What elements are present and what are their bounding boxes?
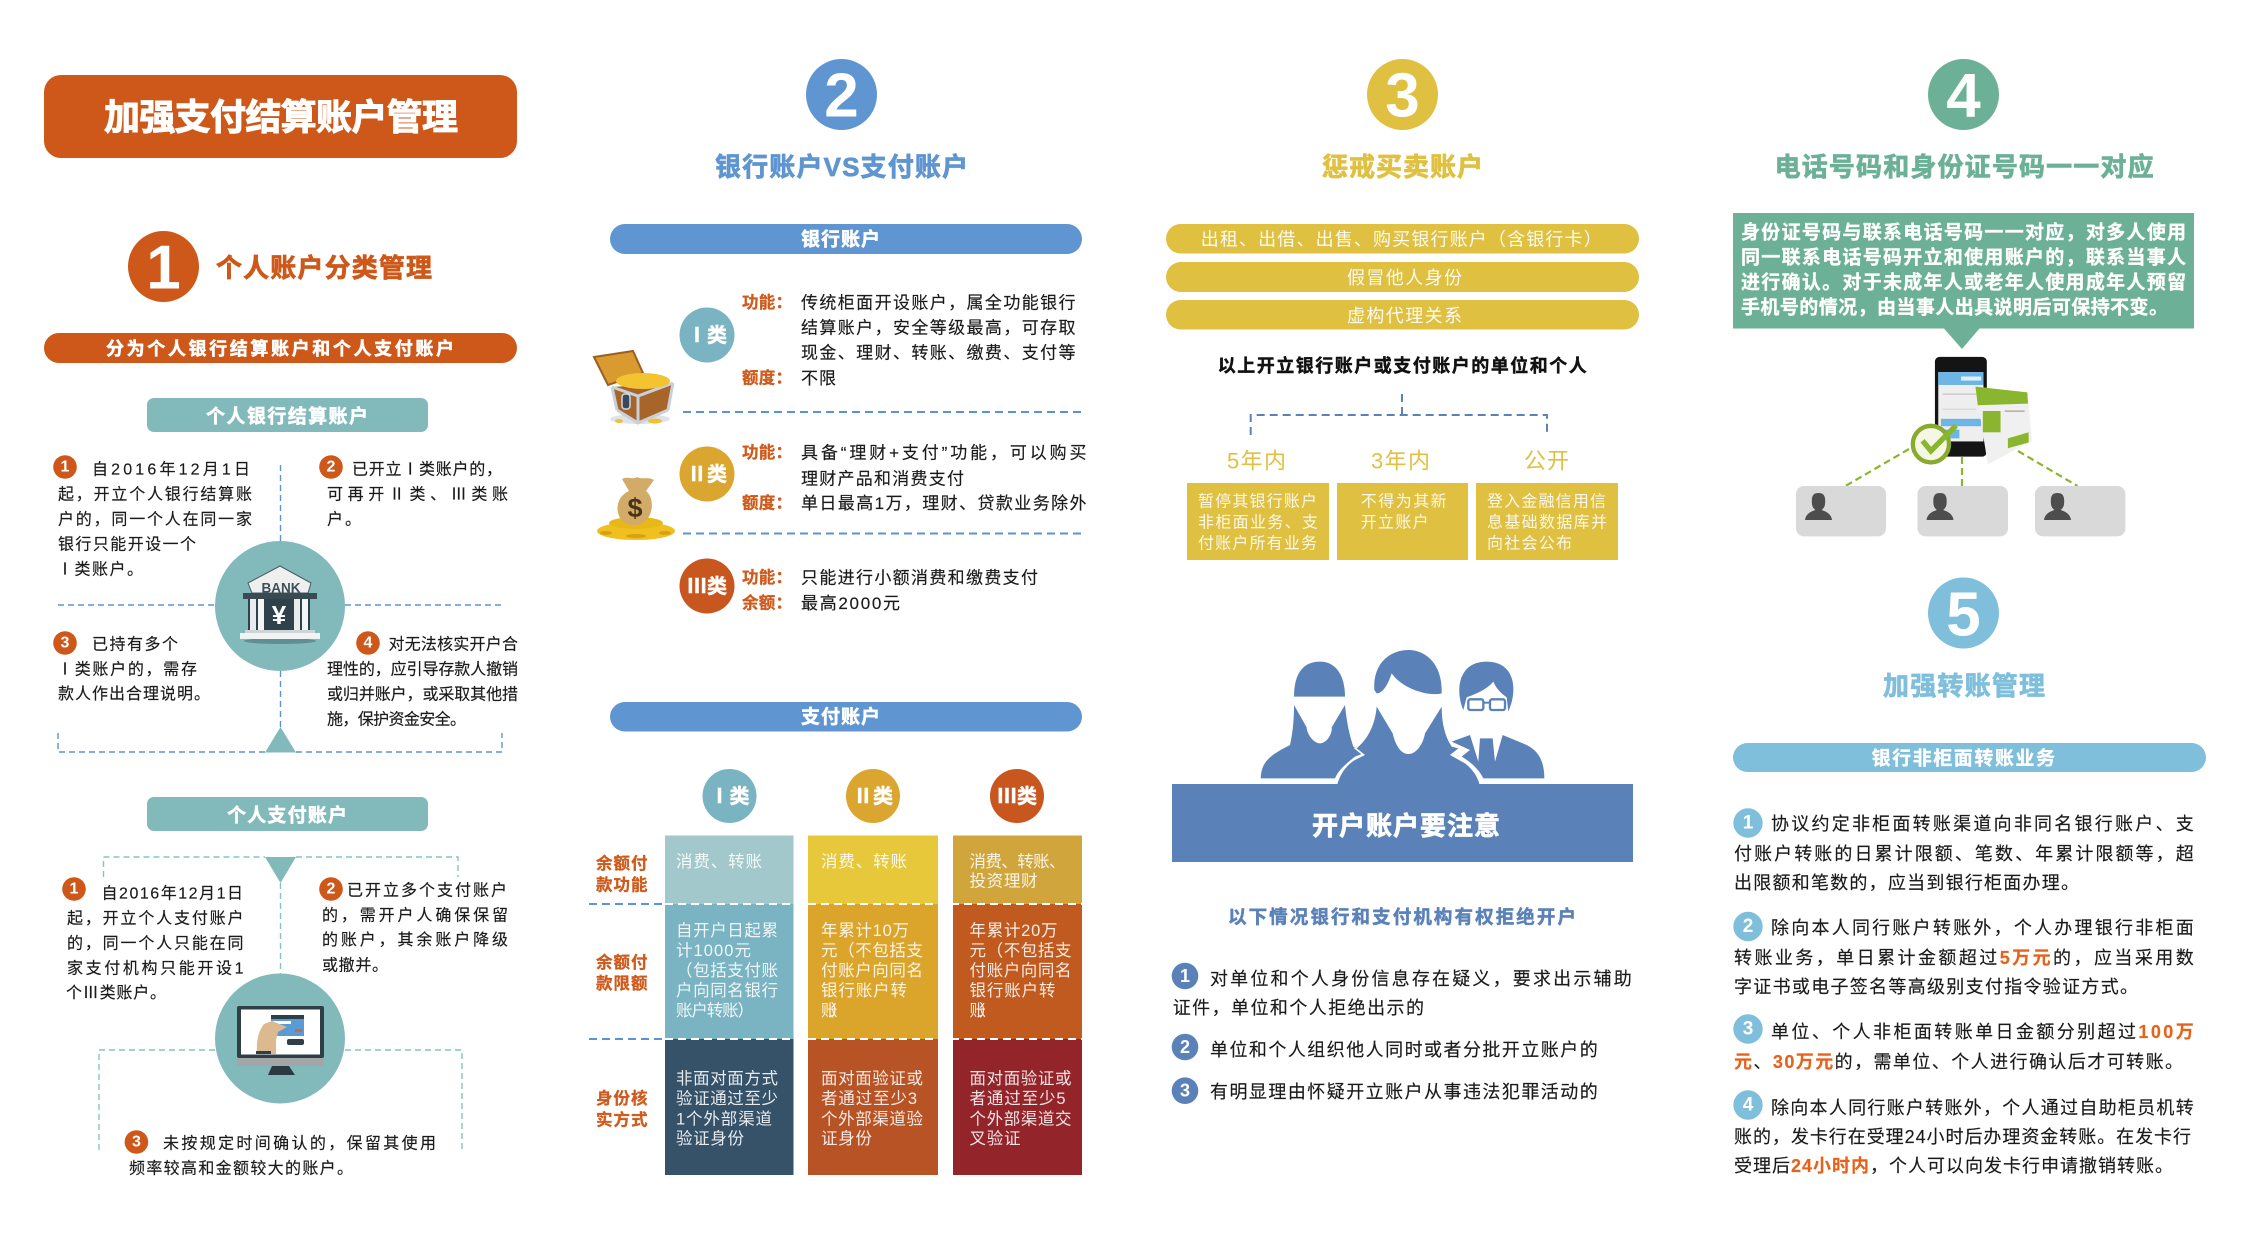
payment rule 1: 个Ⅲ类账户。: [66, 984, 166, 1002]
section 4 number circle: [1928, 59, 1999, 130]
subject heading: 以上开立银行账户或支付账户的单位和个人: [1218, 355, 1587, 376]
type I description: 现金、理财、转账、缴费、支付等: [801, 344, 1076, 363]
transfer rule 2: 字证书或电子签名等高级别支付指令验证方式。: [1734, 977, 2138, 997]
transfer rule 4: 受理后24小时内，个人可以向发卡行申请撤销转账。: [1734, 1156, 2173, 1176]
type III description: 只能进行小额消费和缴费支付: [801, 569, 1038, 588]
heading: personal bank settlement account: 个人银行结算账户: [206, 405, 368, 428]
type I description: 结算账户，安全等级最高，可存取: [801, 319, 1076, 338]
type I badge: [680, 308, 734, 362]
transfer rule 2: [1733, 912, 2194, 997]
payment rule 2: [319, 877, 508, 975]
type I description: 额度：: [742, 369, 792, 388]
table column 1: 非面对面方式: [676, 1069, 778, 1088]
refusal item 1: 对单位和个人身份信息存在疑义，要求出示辅助: [1210, 969, 1632, 989]
bank rule 1: [53, 455, 252, 579]
icon: three people silhouettes: [1261, 650, 1544, 787]
non-counter transfer bar: 银行非柜面转账业务: [1872, 748, 2055, 770]
section 2 heading: 银行账户VS支付账户: [715, 152, 968, 182]
section 3 number circle: 3: [1385, 62, 1420, 130]
transfer rule 3: 3: [1743, 1018, 1753, 1040]
transfer rule 3: [1733, 1014, 2194, 1072]
section 1 subtitle bar: 分为个人银行结算账户和个人支付账户: [106, 338, 454, 359]
table column 2: 银行账户转: [821, 981, 907, 1000]
penalty column 3: 登入金融信用信: [1487, 493, 1606, 511]
table column 1: 账户转账）: [676, 1001, 754, 1020]
panel: section 5 transfer management: [1733, 578, 2206, 1176]
payment account bar: 支付账户: [801, 705, 880, 728]
section 4 number circle: 4: [1946, 62, 1981, 130]
refusal item 3: [1172, 1077, 1598, 1104]
bank rule 1: 1: [61, 458, 70, 476]
bank rule 3: 款人作出合理说明。: [58, 685, 210, 703]
type III badge: Ⅲ类: [687, 575, 727, 598]
table column 1: （包括支付账: [676, 961, 778, 980]
payment rule 2: 2: [327, 880, 336, 898]
offence pills: [1166, 224, 1639, 330]
penalty column 2: 3年内: [1371, 448, 1430, 473]
row labels: 身份核: [596, 1088, 648, 1108]
payment rule 3: [125, 1130, 436, 1178]
refusal item 2: 单位和个人组织他人同时或者分批开立账户的: [1210, 1040, 1598, 1060]
table column 2: [808, 836, 938, 1175]
payment rule 1: 的，同一个人只能在同: [67, 935, 244, 953]
table column 1: 自开户日起累: [676, 921, 778, 940]
penalty column 2: 不得为其新: [1361, 493, 1447, 511]
bank rule 2: 可再开Ⅱ类、Ⅲ类账: [327, 486, 508, 504]
payment rule 3: 3: [132, 1134, 141, 1150]
person card 1: [1796, 486, 1886, 536]
table column 1: 计1000元: [676, 941, 751, 960]
table column 3: 元（不包括支: [970, 941, 1072, 960]
section 2 number circle: 2: [824, 62, 859, 130]
panel: main title and section 1 personal accounts: [44, 75, 518, 1178]
payment rule 1: 家支付机构只能开设1: [67, 960, 244, 978]
bank rule 3: 已持有多个: [92, 636, 178, 654]
type I description: 传统柜面开设账户，属全功能银行: [801, 294, 1076, 313]
heading: personal payment account: 个人支付账户: [227, 804, 347, 827]
bank rule 1: 起，开立个人银行结算账: [58, 485, 252, 504]
type III description: [742, 568, 1038, 613]
type II badge: [680, 446, 734, 502]
section 4 callout: [1733, 213, 2194, 349]
section 1 heading: 个人账户分类管理: [216, 253, 432, 283]
table column 1: 验证身份: [676, 1129, 744, 1148]
table column 1: 消费、转账: [676, 852, 762, 871]
type II description: 额度：: [742, 494, 792, 513]
icon: computer with bank card: [215, 974, 345, 1104]
transfer rule 1: 出限额和笔数的，应当到银行柜面办理。: [1734, 873, 2079, 893]
payment rule 2: 的账户，其余账户降级: [322, 930, 508, 949]
notice banner: [1172, 784, 1633, 862]
penalty column 3: 息基础数据库并: [1487, 514, 1607, 532]
refusal subheading: 以下情况银行和支付机构有权拒绝开户: [1228, 907, 1576, 928]
table column 3: 年累计20万: [970, 921, 1058, 940]
penalty column 3: [1476, 448, 1618, 560]
type III badge: [680, 558, 734, 614]
transfer rule 3: 单位、个人非柜面转账单日金额分别超过100万: [1771, 1022, 2194, 1042]
panel: section 3 punishing account trading: [1166, 59, 1639, 1104]
type I description: 不限: [801, 369, 836, 388]
section 5 heading: 加强转账管理: [1883, 671, 2045, 701]
icon: bank building: ¥: [272, 600, 287, 630]
penalty column 3: 公开: [1524, 448, 1569, 473]
bank rule 3: 3: [61, 634, 70, 652]
table column 2: 证身份: [821, 1129, 872, 1148]
payment rule 2: 的，需开户人确保保留: [322, 906, 508, 924]
bank rule 1: 自2016年12月1日: [92, 461, 250, 479]
table column 2: 付账户向同名: [821, 961, 923, 980]
transfer rule 3: 元、30万元的，需单位、个人进行确认后才可转账。: [1734, 1052, 2183, 1072]
payment rule 1: 1: [70, 880, 79, 898]
section 1 number circle: 1: [146, 234, 181, 302]
refusal item 1: 1: [1180, 966, 1190, 986]
type III description: 余额：: [742, 593, 792, 613]
person connector lines: [1846, 449, 2078, 486]
payment rule 1: [62, 877, 244, 1002]
bank rule 2: 户。: [327, 511, 361, 529]
penalty column 1: 暂停其银行账户: [1198, 493, 1317, 511]
icon: treasure chest: [594, 351, 673, 424]
refusal item 2: [1172, 1034, 1598, 1060]
offence pills: 出租、出借、出售、购买银行账户（含银行卡）: [1201, 230, 1602, 250]
refusal item 3: 有明显理由怀疑开立账户从事违法犯罪活动的: [1210, 1082, 1598, 1102]
table column 3: [953, 836, 1082, 1175]
icon: bank building: BANK: [262, 580, 301, 596]
heading: personal bank settlement account: [147, 398, 428, 432]
section 1 number circle: [128, 231, 199, 302]
type II description: 具备“理财+支付”功能，可以购买: [801, 444, 1086, 463]
type II badge: Ⅱ类: [687, 463, 727, 486]
table column 3: 银行账户转: [970, 981, 1056, 1000]
triangle connector down: [265, 857, 296, 883]
bank rule 4: 4: [364, 634, 373, 652]
type II description: 功能：: [742, 443, 792, 462]
penalty column 3: 向社会公布: [1487, 535, 1572, 553]
row labels: 余额付: [596, 853, 648, 873]
bank rule 4: 或归并账户，或采取其他措: [327, 686, 518, 704]
row labels: 款功能: [596, 876, 648, 895]
section 4 callout: 手机号的情况，由当事人出具说明后可保持不变。: [1741, 296, 2168, 319]
penalty column 1: 付账户所有业务: [1198, 535, 1317, 553]
table column 2: 个外部渠道验: [821, 1110, 924, 1129]
penalty column 1: [1187, 448, 1329, 560]
table column 3: 面对面验证或: [970, 1069, 1072, 1088]
section 4 callout: 身份证号码与联系电话号码一一对应，对多人使用: [1741, 221, 2186, 244]
bank rule 3: Ⅰ类账户的，需存: [57, 661, 197, 679]
type I description: 功能：: [742, 293, 792, 312]
payment rule 2: 已开立多个支付账户: [347, 882, 507, 900]
transfer rule 2: 2: [1743, 916, 1753, 937]
section 4 heading: 电话号码和身份证号码一一对应: [1775, 152, 2154, 182]
transfer rule 1: 付账户转账的日累计限额、笔数、年累计限额等，超: [1734, 844, 2194, 864]
payment rule 1: 起，开立个人支付账户: [67, 910, 244, 928]
transfer rule 2: 转账业务，单日累计金额超过5万元的，应当采用数: [1734, 948, 2194, 968]
offence pills: 虚构代理关系: [1347, 306, 1462, 326]
table column 1: 1个外部渠道: [676, 1110, 772, 1129]
type III description: 最高2000元: [801, 594, 900, 613]
table column 2: 面对面验证或: [821, 1069, 923, 1088]
payment account bar: [610, 702, 1082, 732]
payment rule 2: 或撤并。: [322, 957, 388, 975]
notice banner: 开户账户要注意: [1312, 811, 1500, 841]
icon: money bag: [597, 477, 675, 540]
table column 2: 者通过至少3: [821, 1089, 917, 1108]
type I badge: Ⅰ类: [687, 324, 727, 347]
icon: bank building: [215, 541, 345, 671]
bank types dividers: [683, 412, 1083, 534]
bank account bar: 银行账户: [801, 228, 880, 251]
table column 2: 年累计10万: [821, 921, 909, 940]
section 5 number circle: [1928, 578, 1999, 650]
type II description: [742, 443, 1086, 513]
payment rule 3: 频率较高和金额较大的账户。: [129, 1160, 353, 1178]
bank rule 2: 2: [327, 458, 336, 476]
section 3 heading: 惩戒买卖账户: [1322, 152, 1483, 182]
main title banner: [44, 75, 517, 158]
refusal item 2: 2: [1180, 1037, 1190, 1057]
offence pills: 假冒他人身份: [1347, 268, 1462, 288]
bank rule 3: [53, 631, 210, 703]
penalty column 2: 开立账户: [1361, 514, 1429, 532]
table column 3: 个外部渠道交: [970, 1110, 1072, 1129]
panel: section 4 phone and id number: [1733, 59, 2194, 536]
section 1 subtitle bar: [44, 333, 517, 363]
heading: personal payment account: [147, 797, 428, 831]
row labels: 余额付: [596, 952, 648, 972]
icon: money bag: $: [627, 493, 643, 523]
payment type badges: Ⅱ类: [853, 785, 893, 808]
penalty connector: [1251, 394, 1547, 435]
transfer rule 1: 协议约定非柜面转账渠道向非同名银行账户、支: [1771, 814, 2194, 834]
penalty column 1: 非柜面业务、支: [1198, 514, 1318, 532]
refusal item 3: 3: [1180, 1081, 1190, 1101]
transfer rule 4: [1733, 1090, 2194, 1176]
transfer rule 2: 除向本人同行账户转账外，个人办理银行非柜面: [1771, 918, 2194, 938]
section 2 number circle: [806, 59, 877, 130]
triangle connector up: [265, 727, 296, 752]
transfer rule 1: [1733, 808, 2194, 893]
icon: phone with card and check: [1913, 357, 2032, 464]
person card 2: [1918, 486, 2008, 536]
table column 1: 户向同名银行: [676, 981, 778, 1000]
bank rule 4: [327, 631, 518, 729]
bank rule 4: 施，保护资金安全。: [327, 711, 466, 729]
table column 3: 投资理财: [970, 872, 1038, 891]
payment type badges: [702, 769, 1044, 823]
payment type badges: Ⅲ类: [997, 785, 1037, 808]
penalty column 2: [1337, 448, 1468, 560]
type III description: 功能：: [742, 568, 792, 587]
table column 1: [665, 836, 794, 1175]
table column 2: 消费、转账: [821, 852, 907, 871]
bank account connector lines: [58, 465, 502, 752]
row labels: 实方式: [596, 1110, 648, 1130]
type I description: [742, 293, 1076, 388]
payment rule 3: 未按规定时间确认的，保留其使用: [163, 1135, 436, 1153]
non-counter transfer bar: [1733, 743, 2206, 772]
type II description: 理财产品和消费支付: [801, 469, 964, 488]
table column 3: 付账户向同名: [970, 961, 1072, 980]
payment account connector lines: [99, 857, 462, 1150]
table column 3: 者通过至少5: [970, 1089, 1066, 1108]
transfer rule 1: 1: [1743, 812, 1754, 834]
table row dividers: [589, 904, 1082, 1039]
section 4 callout: 同一联系电话号码开立和使用账户的，联系当事人: [1741, 246, 2186, 269]
table column 1: 验证通过至少: [676, 1089, 778, 1108]
section 5 number circle: 5: [1946, 580, 1981, 650]
bank rule 1: 银行只能开设一个: [58, 536, 196, 554]
bank rule 4: 理性的，应引导存款人撤销: [327, 660, 518, 679]
bank account bar: [610, 224, 1082, 254]
payment type badges: Ⅰ类: [710, 785, 750, 808]
transfer rule 4: 账的，发卡行在受理24小时后办理资金转账。在发卡行: [1734, 1127, 2191, 1147]
refusal item 1: [1172, 963, 1632, 1018]
person card 3: [2035, 486, 2125, 536]
table column 3: 叉验证: [970, 1129, 1020, 1148]
payment rule 1: 自2016年12月1日: [102, 885, 243, 903]
bank rule 1: 户的，同一个人在同一家: [58, 511, 252, 529]
type II description: 单日最高1万，理财、贷款业务除外: [801, 494, 1086, 513]
panel: section 2 bank vs payment accounts: [589, 59, 1086, 1175]
section 4 callout: 进行确认。对于未成年人或老年人使用成年人预留: [1741, 271, 2186, 294]
transfer rule 4: 4: [1743, 1094, 1754, 1116]
bank rule 2: [319, 455, 508, 529]
row labels: [596, 853, 648, 1130]
table column 3: 账）: [970, 1001, 996, 1020]
bank rule 2: 已开立Ⅰ类账户的，: [352, 461, 502, 479]
table column 2: 元（不包括支: [821, 941, 923, 960]
penalty column 1: 5年内: [1227, 448, 1286, 473]
table column 2: 账）: [821, 1001, 847, 1020]
transfer rule 4: 除向本人同行账户转账外，个人通过自助柜员机转: [1771, 1098, 2194, 1118]
table column 3: 消费、转账、: [970, 852, 1066, 871]
row labels: 款限额: [596, 974, 648, 993]
bank rule 4: 对无法核实开户合: [388, 636, 518, 654]
section 3 number circle: [1367, 59, 1438, 130]
main title banner: 加强支付结算账户管理: [104, 97, 458, 138]
bank rule 1: Ⅰ类账户。: [57, 561, 143, 579]
refusal item 1: 证件，单位和个人拒绝出示的: [1173, 998, 1424, 1018]
